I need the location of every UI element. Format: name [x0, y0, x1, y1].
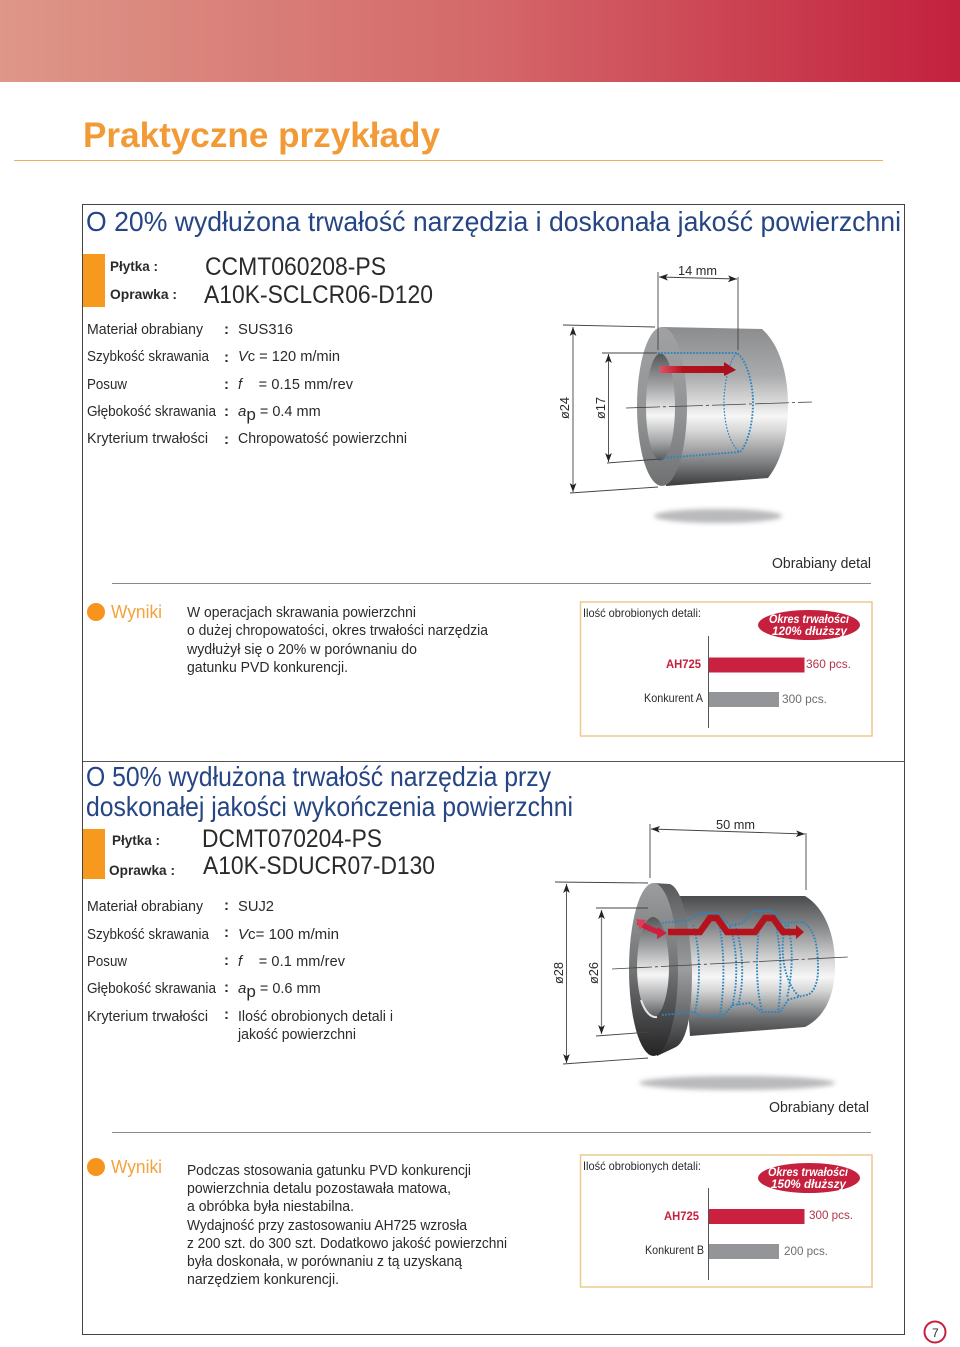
results text 2	[187, 1163, 507, 1288]
tool specification block 2: Płytka :	[112, 832, 160, 848]
tool specification block 2	[83, 825, 435, 880]
cutting parameters table 2: SUJ2	[238, 899, 274, 915]
results text 2: powierzchnia detalu pozostawała matowa,	[187, 1181, 451, 1197]
cutting parameters table: p	[246, 405, 256, 424]
cutting parameters table 2: :	[224, 952, 229, 969]
results text 1: W operacjach skrawania powierzchni	[187, 605, 416, 621]
bar chart 1: Ilość obrobionych detali:	[583, 606, 701, 620]
results text 1: wydłużył się o 20% w porównaniu do	[186, 642, 417, 658]
page number: 7	[932, 1326, 939, 1340]
header banner	[0, 0, 960, 82]
workpiece shadow	[654, 509, 782, 523]
bar: AH725: AH725	[666, 657, 701, 671]
bar: competitor B: Konkurent B	[645, 1243, 704, 1257]
cutting parameters table 2: Materiał obrabiany	[87, 899, 204, 915]
cutting parameters table: Kryterium trwałości	[87, 431, 208, 447]
cutting parameters table: :	[224, 349, 229, 366]
dimension: diameter 17: ø17	[593, 397, 608, 419]
cutting parameters table 2	[87, 897, 393, 1043]
cutting parameters table 2: p	[246, 982, 256, 1001]
cutting parameters table: a	[238, 403, 246, 420]
bar chart 2	[580, 1155, 872, 1287]
bar: AH725 second: 300 pcs.	[809, 1208, 853, 1222]
results heading 1: Wyniki	[111, 601, 162, 622]
heading: example 2: doskonałej jakości wykończenia powierzchni	[86, 791, 573, 822]
bar chart 2: Ilość obrobionych detali:	[583, 1159, 701, 1173]
tool specification block 2: DCMT070204-PS	[202, 825, 382, 853]
bore 2	[637, 917, 669, 1017]
results heading 1	[87, 601, 162, 622]
heading: example 2	[86, 761, 573, 822]
machining path	[658, 353, 753, 458]
tool specification block 2: A10K-SDUCR07-D130	[203, 852, 435, 880]
cutting parameters table: :	[224, 431, 229, 448]
panel: example 1	[83, 206, 901, 736]
cutting parameters table: Vc = 120 m/min	[238, 349, 340, 365]
cutting parameters table: Materiał obrabiany	[87, 322, 204, 338]
cutting parameters table	[87, 321, 407, 448]
cylinder front face	[637, 327, 687, 486]
callout: tool life 120%	[758, 610, 860, 640]
cutting parameters table 2: :	[224, 979, 229, 996]
callout: tool life 120%: Okres trwałości	[769, 612, 850, 626]
dimension: length 50 mm	[650, 817, 806, 890]
bar: competitor A: 300 pcs.	[782, 692, 827, 706]
flange rim	[653, 883, 692, 1056]
cutting parameters table 2: :	[224, 924, 229, 941]
cutting parameters table 2: a	[238, 980, 246, 997]
cutting parameters table: = 0.4 mm	[256, 404, 321, 420]
cutting parameters table: Posuw	[87, 377, 127, 393]
bar: competitor B: 200 pcs.	[784, 1244, 828, 1258]
dimension: diameter 26: ø26	[586, 962, 601, 984]
results text 1: o dużej chropowatości, okres trwałości narzędzia	[187, 623, 489, 639]
cutting parameters table: Szybkość skrawania	[87, 349, 210, 365]
cutting parameters table 2: Vc= 100 m/min	[238, 927, 339, 943]
bar: AH725 second: AH725	[664, 1209, 699, 1223]
machining path 2	[662, 911, 818, 1017]
heading: example 1: O 20% wydłużona trwałość narzędzia i doskonała jakość powierzchni	[86, 206, 901, 237]
cutting parameters table 2: f = 0.1 mm/rev	[238, 954, 346, 970]
flange front face	[629, 883, 678, 1056]
bar: AH725	[666, 657, 851, 672]
bar: competitor B	[645, 1243, 828, 1259]
workpiece shadow 2	[639, 1076, 835, 1090]
cutting direction arrow	[660, 362, 736, 376]
bar chart 1	[580, 602, 872, 736]
bar: AH725: 360 pcs.	[806, 657, 851, 671]
cutting parameters table 2: Kryterium trwałości	[87, 1009, 208, 1025]
caption: workpiece 1: Obrabiany detal	[772, 555, 871, 572]
cutting path arrow	[636, 918, 804, 939]
diagram: workpiece 2	[551, 817, 848, 1090]
cutting parameters table: Głębokość skrawania	[87, 404, 217, 420]
results text 1	[186, 605, 489, 676]
dimension: diameter 28: ø28	[551, 962, 566, 984]
cutting parameters table: :	[224, 321, 229, 338]
callout: tool life 150%: 150% dłuższy	[771, 1177, 847, 1191]
cutting parameters table 2: Posuw	[87, 954, 127, 970]
callout: tool life 120%: 120% dłuższy	[772, 624, 848, 638]
bore highlight	[641, 1000, 657, 1017]
results heading 2: Wyniki	[111, 1156, 162, 1177]
results text 2: narzędziem konkurencji.	[187, 1272, 339, 1288]
results heading 2	[87, 1156, 162, 1177]
cylinder body	[662, 327, 788, 486]
axis line 2	[612, 957, 848, 969]
panel: example 2	[83, 761, 872, 1288]
results text 2: Wydajność przy zastosowaniu AH725 wzrosła	[187, 1218, 468, 1234]
tool specification block	[83, 253, 433, 309]
axis line	[626, 402, 812, 408]
tool specification block: A10K-SCLCR06-D120	[204, 281, 433, 309]
dimension: diameter 24	[557, 325, 658, 493]
cutting parameters table 2: jakość powierzchni	[237, 1027, 356, 1043]
dimension: diameter 28	[551, 882, 648, 1064]
cutting parameters table 2: :	[224, 897, 229, 914]
diagram: workpiece 1	[557, 263, 812, 523]
caption: workpiece 2: Obrabiany detal	[769, 1099, 869, 1116]
bore	[646, 354, 675, 460]
dimension: length 50 mm: 50 mm	[716, 817, 755, 832]
tool specification block: Płytka :	[110, 258, 158, 274]
dimension: length 14 mm	[658, 263, 738, 350]
page number	[924, 1322, 946, 1342]
heading: example 2: O 50% wydłużona trwałość narzędzia przy	[86, 761, 551, 792]
outer frame	[82, 204, 904, 1334]
tool specification block 2: Oprawka :	[109, 862, 175, 878]
callout: tool life 150%	[758, 1163, 860, 1193]
tool specification block: Oprawka :	[110, 286, 177, 302]
cutting parameters table: :	[224, 403, 229, 420]
dimension: diameter 24: ø24	[557, 397, 572, 419]
dimension: diameter 17	[593, 353, 660, 463]
cutting parameters table 2: Głębokość skrawania	[87, 981, 217, 997]
cutting parameters table: Chropowatość powierzchni	[238, 431, 407, 447]
cutting parameters table: f = 0.15 mm/rev	[238, 377, 354, 393]
cutting parameters table 2: Szybkość skrawania	[87, 927, 210, 943]
bar: AH725 second	[664, 1208, 853, 1224]
results text 2: była doskonała, w porównaniu z tą uzyskaną	[187, 1254, 463, 1270]
bar: competitor A: Konkurent A	[644, 691, 703, 705]
cutting parameters table 2: :	[224, 1006, 229, 1023]
cutting parameters table: :	[224, 376, 229, 393]
cutting parameters table 2: Ilość obrobionych detali i	[238, 1009, 393, 1025]
dimension: length 14 mm: 14 mm	[678, 263, 717, 278]
results text 2: a obróbka była niestabilna.	[187, 1199, 354, 1215]
results text 2: z 200 szt. do 300 szt. Dodatkowo jakość powierzchni	[187, 1236, 507, 1252]
cutting parameters table 2: = 0.6 mm	[256, 981, 321, 997]
bar: competitor A	[644, 691, 827, 707]
page title: Praktyczne przykłady	[83, 116, 441, 155]
stepped shaft body	[680, 896, 835, 1036]
results text 2: Podczas stosowania gatunku PVD konkurencji	[187, 1163, 471, 1179]
tool specification block: CCMT060208-PS	[205, 253, 386, 281]
results text 1: gatunku PVD konkurencji.	[187, 660, 348, 676]
cutting parameters table: SUS316	[238, 322, 293, 338]
callout: tool life 150%: Okres trwałości	[768, 1165, 849, 1179]
dimension: diameter 26	[586, 908, 650, 1036]
